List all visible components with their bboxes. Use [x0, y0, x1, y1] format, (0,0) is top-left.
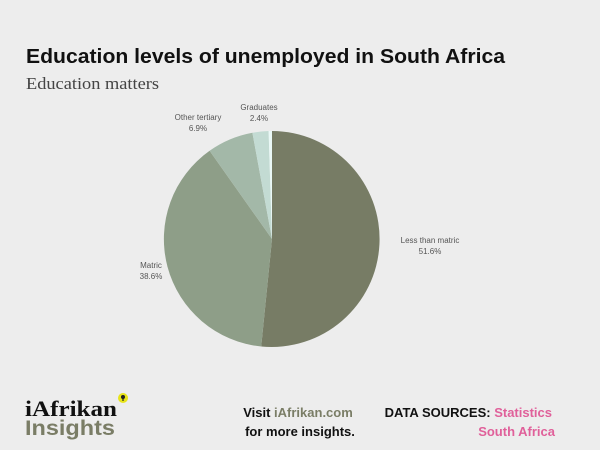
label: less than matric: Less than matric — [401, 236, 459, 245]
pie chart — [164, 131, 380, 347]
slice: matric — [164, 151, 272, 346]
label: other tertiary: 6.9% — [189, 124, 207, 133]
label: less than matric: 51.6% — [419, 247, 441, 256]
label: graduates: 2.4% — [250, 114, 268, 123]
slice: other — [269, 131, 272, 239]
icon: africa badge — [118, 393, 128, 403]
label: other tertiary: Other tertiary — [175, 113, 221, 122]
logo: Insights — [25, 417, 115, 440]
label: graduates: Graduates — [240, 103, 278, 112]
visit text: Visit iAfrikan.com — [243, 405, 353, 420]
slice: graduates — [252, 131, 272, 239]
data sources: South Africa — [478, 424, 556, 439]
title: Education levels of unemployed in South Africa — [26, 46, 506, 68]
data sources: DATA SOURCES: Statistics — [385, 405, 552, 420]
slice: other tertiary — [210, 133, 272, 239]
subtitle: Education matters — [26, 74, 159, 93]
label: matric: Matric — [140, 261, 162, 270]
slice: less than matric — [261, 131, 380, 347]
visit text: for more insights. — [245, 424, 355, 439]
label: matric: 38.6% — [140, 272, 162, 281]
logo: iAfrikan — [25, 396, 117, 421]
logo — [25, 393, 128, 440]
